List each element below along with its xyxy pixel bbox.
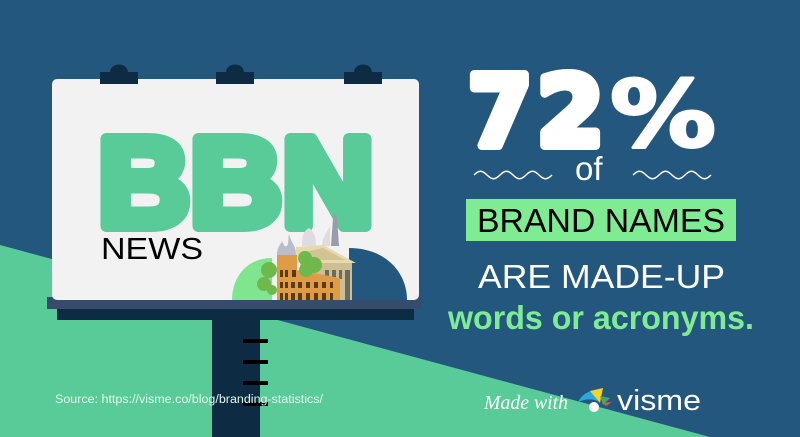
statistic 72% (468, 56, 716, 168)
text: words or acronyms: words or acronyms. (447, 299, 754, 336)
text: visme: visme (617, 385, 701, 417)
source note: Source: https://visme.co/blog/branding-statistics/ (55, 394, 324, 406)
wavy line left (474, 171, 552, 179)
visme credit (483, 385, 701, 417)
text: made with: Made with (483, 392, 568, 414)
billboard (47, 64, 422, 437)
statistic 72%: % (610, 61, 716, 168)
NEWS text: NEWS (101, 231, 203, 266)
billboard beam (57, 309, 414, 320)
illustration: Rome landmarks (232, 213, 407, 300)
text: of: of (575, 150, 603, 187)
billboard ledge (47, 297, 422, 309)
billboard panel (52, 79, 419, 300)
statistic 72%: 2 (537, 56, 604, 168)
text: are made-up: ARE MADE-UP (478, 258, 725, 295)
icon: visme logo (578, 388, 612, 412)
billboard pole (212, 318, 268, 437)
billboard clips (100, 64, 382, 84)
highlighted label: brand names: BRAND NAMES (477, 202, 725, 239)
statistic 72%: 7 (468, 56, 532, 168)
BBN logo text: BBN (98, 112, 374, 253)
wavy line right (633, 171, 711, 179)
